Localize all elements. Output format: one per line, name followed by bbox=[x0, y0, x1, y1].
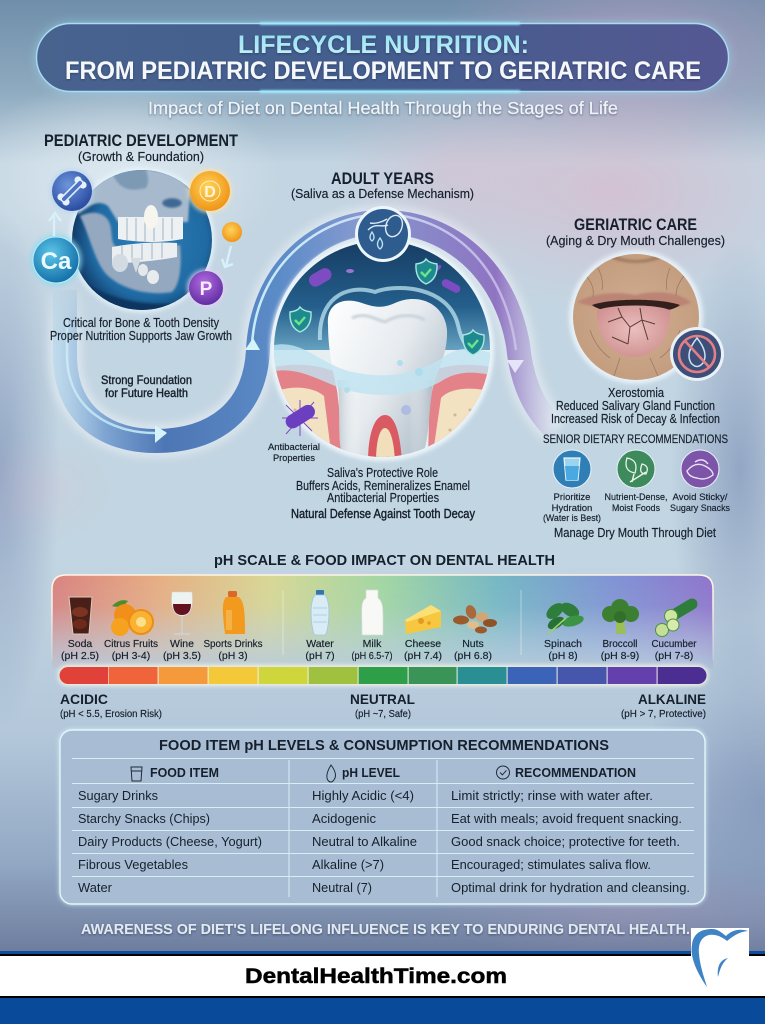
row: starchy snacks: Starchy Snacks (Chips) bbox=[78, 811, 210, 826]
section: geriatric care bbox=[543, 216, 730, 540]
row: sugary drinks: Highly Acidic (<4) bbox=[312, 788, 414, 803]
column header: pH level bbox=[327, 765, 400, 782]
acidic label bbox=[60, 691, 162, 720]
food: milk bbox=[352, 590, 392, 662]
food: spinach: Spinach bbox=[544, 638, 582, 650]
food: sports drink: Sports Drinks bbox=[204, 638, 262, 650]
pH food panel bbox=[52, 575, 713, 668]
row: sugary drinks bbox=[78, 788, 653, 803]
recommendation: avoid sticky snacks bbox=[670, 450, 730, 514]
food: spinach bbox=[543, 600, 585, 662]
row: sugary drinks: Limit strictly; rinse with water after. bbox=[451, 788, 653, 803]
small arrows between nutrients bbox=[49, 213, 233, 267]
senior recommendations heading: SENIOR DIETARY RECOMMENDATIONS bbox=[543, 434, 728, 446]
geriatric heading: GERIATRIC CARE bbox=[574, 216, 697, 234]
food: spinach: (pH 8) bbox=[548, 650, 578, 662]
alkaline label: ALKALINE bbox=[638, 691, 706, 707]
logo: tooth bbox=[691, 928, 749, 987]
row: fibrous vegetables bbox=[78, 857, 651, 872]
icon: vitamin D: D bbox=[204, 184, 216, 201]
recommendation: nutrient-dense foods: Moist Foods bbox=[612, 503, 660, 514]
column header: pH level: pH LEVEL bbox=[342, 765, 400, 780]
food: citrus: (pH 3-4) bbox=[112, 650, 150, 662]
column header: food item: FOOD ITEM bbox=[150, 765, 219, 780]
neutral label: NEUTRAL bbox=[350, 691, 415, 707]
food: broccoli: Broccoll bbox=[602, 638, 638, 650]
bacteria in saliva bbox=[307, 264, 462, 294]
food: wine: Wine bbox=[170, 638, 194, 650]
food: broccoli bbox=[601, 599, 639, 662]
arrow head up bbox=[245, 338, 260, 350]
section: pediatric development bbox=[30, 132, 242, 400]
pediatric benefits text bbox=[50, 316, 232, 343]
section: pH scale bbox=[52, 552, 713, 720]
xerostomia text bbox=[551, 386, 720, 426]
food: cheese bbox=[404, 605, 442, 662]
row: dairy bbox=[78, 834, 680, 849]
recommendation: avoid sticky snacks: Sugary Snacks bbox=[670, 503, 730, 514]
adult benefits text: Buffers Acids, Remineralizes Enamel bbox=[296, 479, 470, 493]
food: cucumber: (pH 7-8) bbox=[655, 650, 693, 662]
adult benefits text: Natural Defense Against Tooth Decay bbox=[291, 507, 476, 521]
arrow head bottom bbox=[155, 425, 167, 443]
row: starchy snacks bbox=[78, 811, 682, 826]
row: starchy snacks: Acidogenic bbox=[312, 811, 376, 826]
adult benefits text: Antibacterial Properties bbox=[327, 491, 439, 505]
acidic label: ACIDIC bbox=[60, 691, 108, 707]
row: dairy: Dairy Products (Cheese, Yogurt) bbox=[78, 834, 262, 849]
food: soda: Soda bbox=[68, 638, 92, 650]
food: nuts: (pH 6.8) bbox=[454, 650, 492, 662]
food: cucumber bbox=[652, 604, 697, 662]
jaw x-ray illustration bbox=[69, 167, 215, 320]
pediatric benefits text: Proper Nutrition Supports Jaw Growth bbox=[50, 329, 232, 343]
icon: calcium bbox=[30, 234, 82, 286]
icon: orange ball bbox=[222, 222, 242, 242]
title line 1: LIFECYCLE NUTRITION: bbox=[238, 31, 529, 59]
icon: phosphorus: P bbox=[200, 279, 213, 300]
food: nuts: Nuts bbox=[462, 638, 484, 650]
recommendation: avoid sticky snacks: Avoid Sticky/ bbox=[672, 492, 728, 503]
recommendation: hydration bbox=[543, 450, 601, 524]
food: citrus: Citrus Fruits bbox=[104, 638, 158, 650]
food: soda bbox=[61, 597, 99, 662]
food: water bottle bbox=[305, 590, 335, 662]
bacterium callout: Antibacterial bbox=[268, 442, 320, 453]
food: water bottle: (pH 7) bbox=[305, 650, 335, 662]
xerostomia text: Reduced Salivary Gland Function bbox=[556, 399, 715, 413]
acidic label: (pH < 5.5, Erosion Risk) bbox=[60, 708, 162, 720]
row: water: Optimal drink for hydration and cleansing. bbox=[451, 880, 690, 895]
alkaline label bbox=[621, 691, 706, 720]
adult subheading: (Saliva as a Defense Mechanism) bbox=[291, 186, 474, 201]
neutral label: (pH ~7, Safe) bbox=[355, 708, 411, 720]
icon: no water bbox=[670, 327, 724, 381]
row: sugary drinks: Sugary Drinks bbox=[78, 788, 158, 803]
row: fibrous vegetables: Fibrous Vegetables bbox=[78, 857, 188, 872]
pediatric subheading: (Growth & Foundation) bbox=[78, 149, 204, 164]
food: sports drink bbox=[204, 591, 262, 662]
geriatric takeaway: Manage Dry Mouth Through Diet bbox=[554, 526, 716, 540]
foundation note: Strong Foundation bbox=[101, 373, 192, 387]
food: soda: (pH 2.5) bbox=[61, 650, 99, 662]
food: sports drink: (pH 3) bbox=[218, 650, 248, 662]
icon: vitamin D bbox=[188, 169, 232, 213]
food: cucumber: Cucumber bbox=[652, 638, 697, 650]
row: dairy: Neutral to Alkaline bbox=[312, 834, 417, 849]
row: dairy: Good snack choice; protective for teeth. bbox=[451, 834, 680, 849]
title banner bbox=[36, 23, 729, 92]
recommendation: hydration: Hydration bbox=[552, 503, 592, 514]
row: water: Water bbox=[78, 880, 113, 895]
neutral label bbox=[350, 691, 415, 720]
dry mouth illustration bbox=[569, 250, 703, 384]
food: milk: Milk bbox=[363, 638, 382, 650]
column header: recommendation: RECOMMENDATION bbox=[515, 765, 636, 780]
recommendation: nutrient-dense foods bbox=[604, 450, 668, 514]
geriatric subheading: (Aging & Dry Mouth Challenges) bbox=[546, 233, 725, 248]
adult benefits text bbox=[291, 466, 476, 521]
icon: bone bbox=[50, 169, 94, 213]
row: water bbox=[78, 880, 690, 895]
row: fibrous vegetables: Alkaline (>7) bbox=[312, 857, 384, 872]
adult benefits text: Saliva's Protective Role bbox=[327, 466, 438, 480]
pH heading: pH SCALE & FOOD IMPACT ON DENTAL HEALTH bbox=[214, 552, 555, 569]
food: broccoli: (pH 8-9) bbox=[601, 650, 639, 662]
subtitle: Impact of Diet on Dental Health Through the Stages of Life bbox=[148, 98, 618, 118]
pH colour bar bbox=[58, 665, 708, 686]
alkaline label: (pH > 7, Protective) bbox=[621, 708, 706, 720]
food: citrus bbox=[104, 600, 158, 662]
xerostomia text: Xerostomia bbox=[608, 386, 664, 400]
food: wine bbox=[163, 592, 201, 662]
lifecycle arrow band bbox=[65, 214, 556, 443]
pediatric heading: PEDIATRIC DEVELOPMENT bbox=[44, 132, 238, 150]
food: water bottle: Water bbox=[306, 638, 334, 650]
bacterium callout bbox=[268, 400, 320, 464]
title line 2: FROM PEDIATRIC DEVELOPMENT TO GERIATRIC CARE bbox=[65, 57, 701, 85]
table title: FOOD ITEM pH LEVELS & CONSUMPTION RECOMMENDATIONS bbox=[159, 737, 609, 754]
arrow head down bbox=[507, 360, 524, 373]
food: wine: (pH 3.5) bbox=[163, 650, 201, 662]
row: water: Neutral (7) bbox=[312, 880, 372, 895]
icon: salivary gland bbox=[355, 206, 411, 262]
tooth illustration bbox=[270, 235, 495, 462]
food: cheese: (pH 7.4) bbox=[404, 650, 442, 662]
xerostomia text: Increased Risk of Decay & Infection bbox=[551, 412, 720, 426]
footer band bbox=[0, 951, 765, 1024]
icon: calcium: Ca bbox=[41, 248, 72, 275]
website: DentalHealthTime.com bbox=[245, 965, 507, 988]
food: nuts bbox=[453, 604, 497, 662]
recommendation: nutrient-dense foods: Nutrient-Dense, bbox=[604, 492, 668, 503]
closing tagline: AWARENESS OF DIET'S LIFELONG INFLUENCE IS KEY TO ENDURING DENTAL HEALTH. bbox=[81, 921, 690, 938]
bacterium callout: Properties bbox=[273, 453, 315, 464]
food: milk: (pH 6.5-7) bbox=[352, 650, 392, 662]
recommendation: hydration: (Water is Best) bbox=[543, 513, 601, 524]
foundation note bbox=[101, 373, 192, 400]
recommendation: hydration: Prioritize bbox=[554, 492, 590, 503]
icon: phosphorus bbox=[187, 269, 225, 307]
food: cheese: Cheese bbox=[405, 638, 441, 650]
section: adult years bbox=[268, 170, 495, 521]
pediatric benefits text: Critical for Bone & Tooth Density bbox=[63, 316, 220, 330]
row: starchy snacks: Eat with meals; avoid frequent snacking. bbox=[451, 811, 682, 826]
recommendations table bbox=[59, 729, 706, 905]
shields bbox=[290, 259, 484, 355]
row: fibrous vegetables: Encouraged; stimulates saliva flow. bbox=[451, 857, 651, 872]
adult heading: ADULT YEARS bbox=[331, 170, 434, 188]
foundation note: for Future Health bbox=[105, 386, 188, 400]
